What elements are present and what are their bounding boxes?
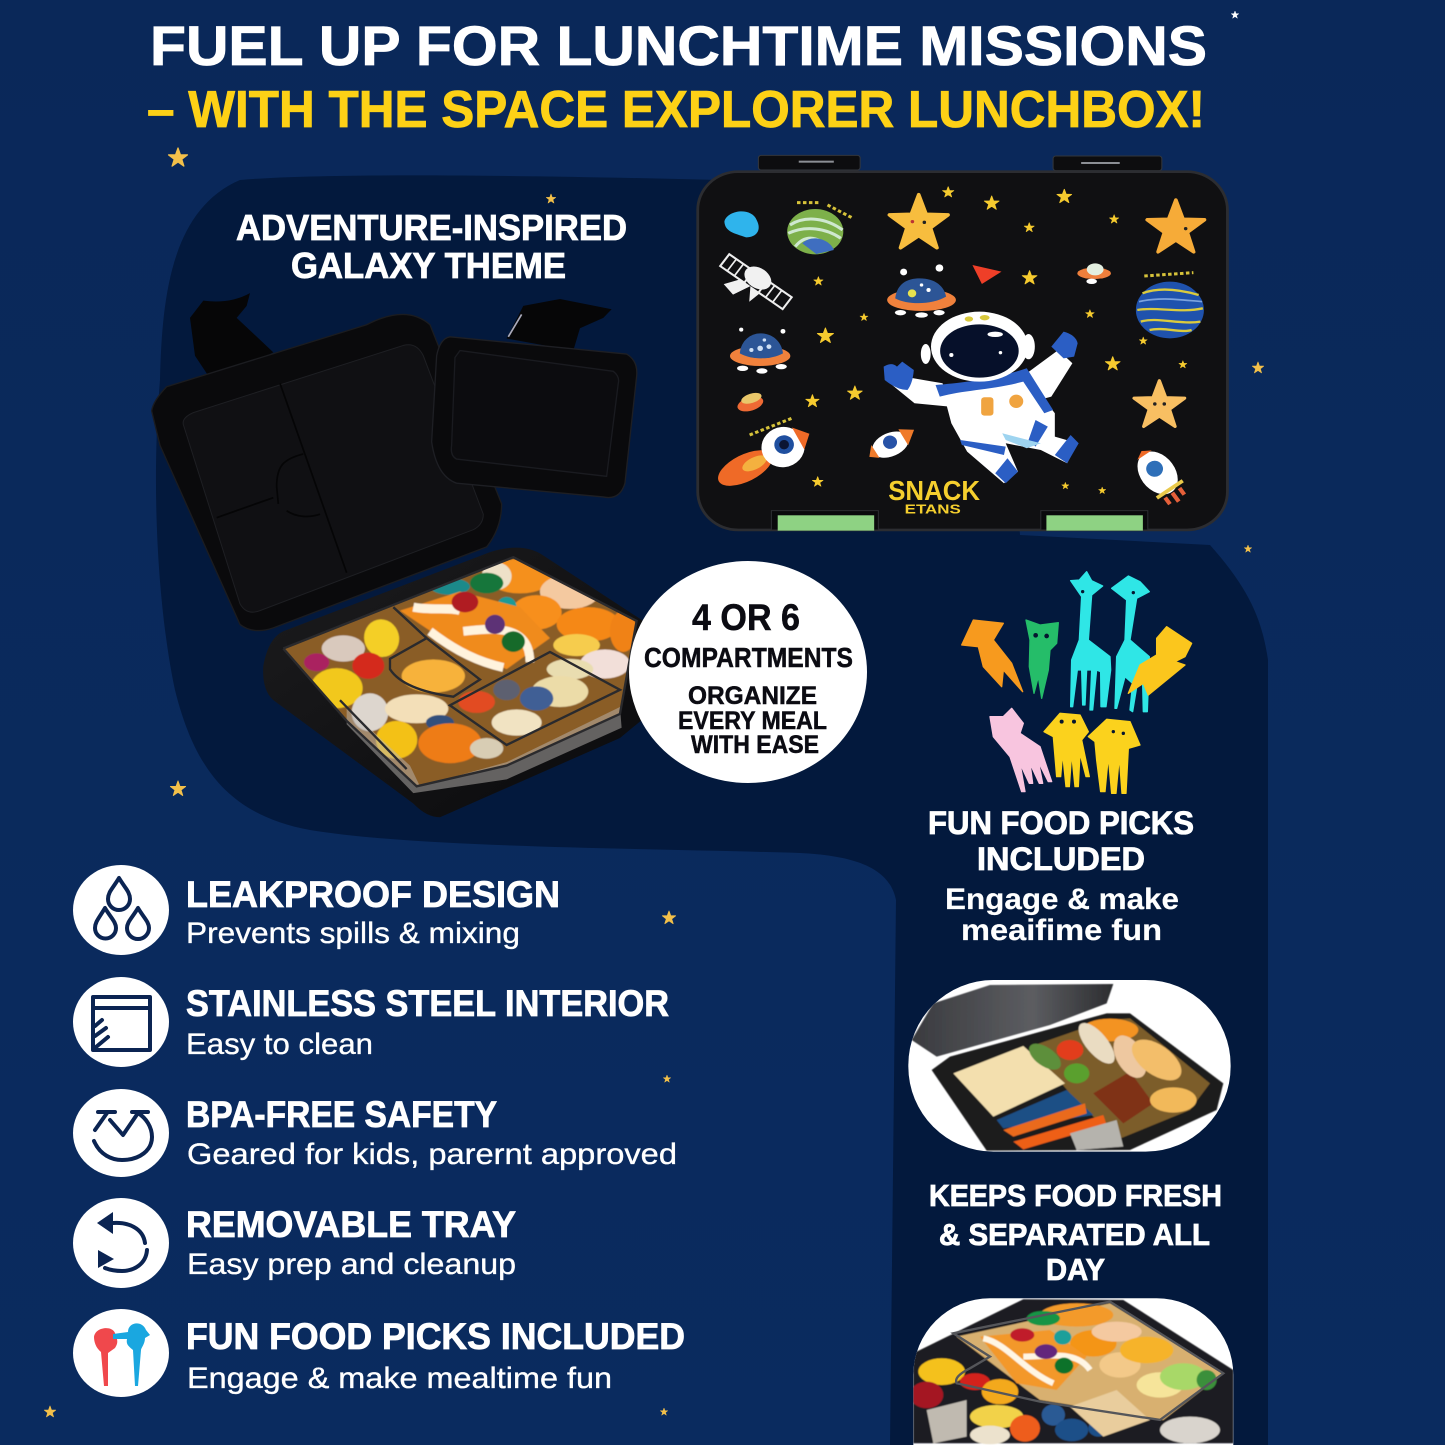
open lid: [152, 314, 502, 631]
text: fun food picks: [928, 805, 1194, 947]
red pennant: [972, 265, 1002, 284]
food: [283, 557, 637, 786]
text: keeps food fresh: DAY: [1046, 1252, 1105, 1287]
clips: [190, 293, 273, 383]
brand: snack: SNACK: [888, 476, 980, 507]
text: keeps food fresh: KEEPS FOOD FRESH: [929, 1178, 1222, 1213]
feature: leakproof design: LEAKPROOF DESIGN: [186, 874, 560, 915]
feature: fun food picks: Engage & make mealtime fun: [187, 1362, 612, 1395]
small stars: [806, 187, 1187, 494]
green planet: [787, 209, 843, 254]
heading: galaxy theme: [236, 207, 627, 286]
gloves: [884, 362, 914, 390]
ufo top: [887, 264, 956, 318]
text: keeps food fresh: & SEPARATED ALL: [939, 1217, 1210, 1252]
badge: compartments: 4 OR 6: [692, 597, 800, 638]
feature: removable tray: Easy prep and cleanup: [187, 1248, 516, 1281]
feature: stainless steel interior: Easy to clean: [186, 1028, 373, 1061]
photo: food box with sandwich: [908, 980, 1231, 1152]
astronaut: [884, 312, 1079, 483]
feature: fun food picks: FUN FOOD PICKS INCLUDED: [186, 1316, 685, 1357]
text: fun food picks: FUN FOOD PICKS: [928, 805, 1194, 841]
tiny labels: [750, 203, 1193, 435]
text: fun food picks: meaifime fun: [961, 914, 1162, 947]
icon: refresh arrows: [73, 1198, 169, 1288]
feature: stainless steel interior: [73, 977, 669, 1067]
brand: snack: ETANS: [905, 502, 961, 516]
green latches: [771, 511, 1148, 531]
mini ufo left: [735, 391, 765, 414]
icon: circular check arrow: [73, 1089, 169, 1177]
open lunchbox with food: [152, 293, 653, 817]
brand: snack: [888, 476, 980, 516]
icon: tray window: [73, 977, 169, 1067]
big stars: [889, 195, 1205, 426]
heading: galaxy theme: ADVENTURE-INSPIRED: [236, 207, 627, 248]
feature: removable tray: [73, 1198, 516, 1288]
badge: compartments: [629, 561, 867, 783]
mini ufo: [1077, 263, 1111, 284]
blue blob: [724, 211, 759, 237]
feature: leakproof design: Prevents spills & mixing: [186, 917, 520, 950]
title: FUEL UP FOR LUNCHTIME MISSIONS: [150, 14, 1207, 77]
feature: removable tray: REMOVABLE TRAY: [186, 1204, 516, 1245]
glass front wall: [347, 707, 622, 793]
badge: compartments: WITH EASE: [691, 731, 819, 759]
title: [147, 14, 1207, 139]
astronaut arms: [890, 377, 950, 407]
feature: leakproof design: [73, 865, 560, 955]
badge: compartments: ORGANIZE: [688, 682, 817, 710]
icon: colored food picks: [73, 1309, 169, 1397]
panel: food picks illustration: [962, 572, 1192, 793]
astronaut body: [943, 377, 1078, 483]
rocket right: [1127, 441, 1193, 511]
mini rocket: [863, 423, 921, 465]
feature: fun food picks: [73, 1309, 685, 1397]
lid body: [698, 172, 1227, 530]
tray: [263, 548, 653, 817]
hinges: [758, 155, 1162, 171]
text: fun food picks: Engage & make: [945, 883, 1179, 916]
ufo left: [730, 328, 790, 374]
feature: bpa-free safety: [73, 1089, 677, 1177]
lunchbox lid with space artwork: [698, 155, 1227, 531]
heading: galaxy theme: GALAXY THEME: [291, 245, 566, 286]
tray dividers: [283, 557, 637, 786]
feature: stainless steel interior: STAINLESS STEEL INTERIOR: [186, 983, 669, 1024]
text: keeps food fresh: [929, 1178, 1222, 1287]
feature: bpa-free safety: BPA-FREE SAFETY: [186, 1094, 497, 1135]
text: fun food picks: INCLUDED: [977, 841, 1145, 877]
satellite: [710, 249, 796, 322]
feature: bpa-free safety: Geared for kids, parernt approved: [187, 1138, 677, 1171]
badge: compartments: EVERY MEAL: [678, 707, 827, 735]
backpack details: [981, 397, 993, 416]
panel: dark flowing backdrop: [156, 175, 1268, 1445]
small lid: [432, 337, 637, 498]
blue planet: [1136, 282, 1204, 338]
rocket left: [708, 416, 819, 498]
helmet: [921, 344, 931, 364]
photo: food box with fruit: [910, 1298, 1233, 1445]
title line 2: – WITH THE SPACE EXPLORER LUNCHBOX!: [147, 81, 1205, 139]
icon: water drops: [73, 865, 169, 955]
badge: compartments: COMPARTMENTS: [644, 642, 853, 673]
